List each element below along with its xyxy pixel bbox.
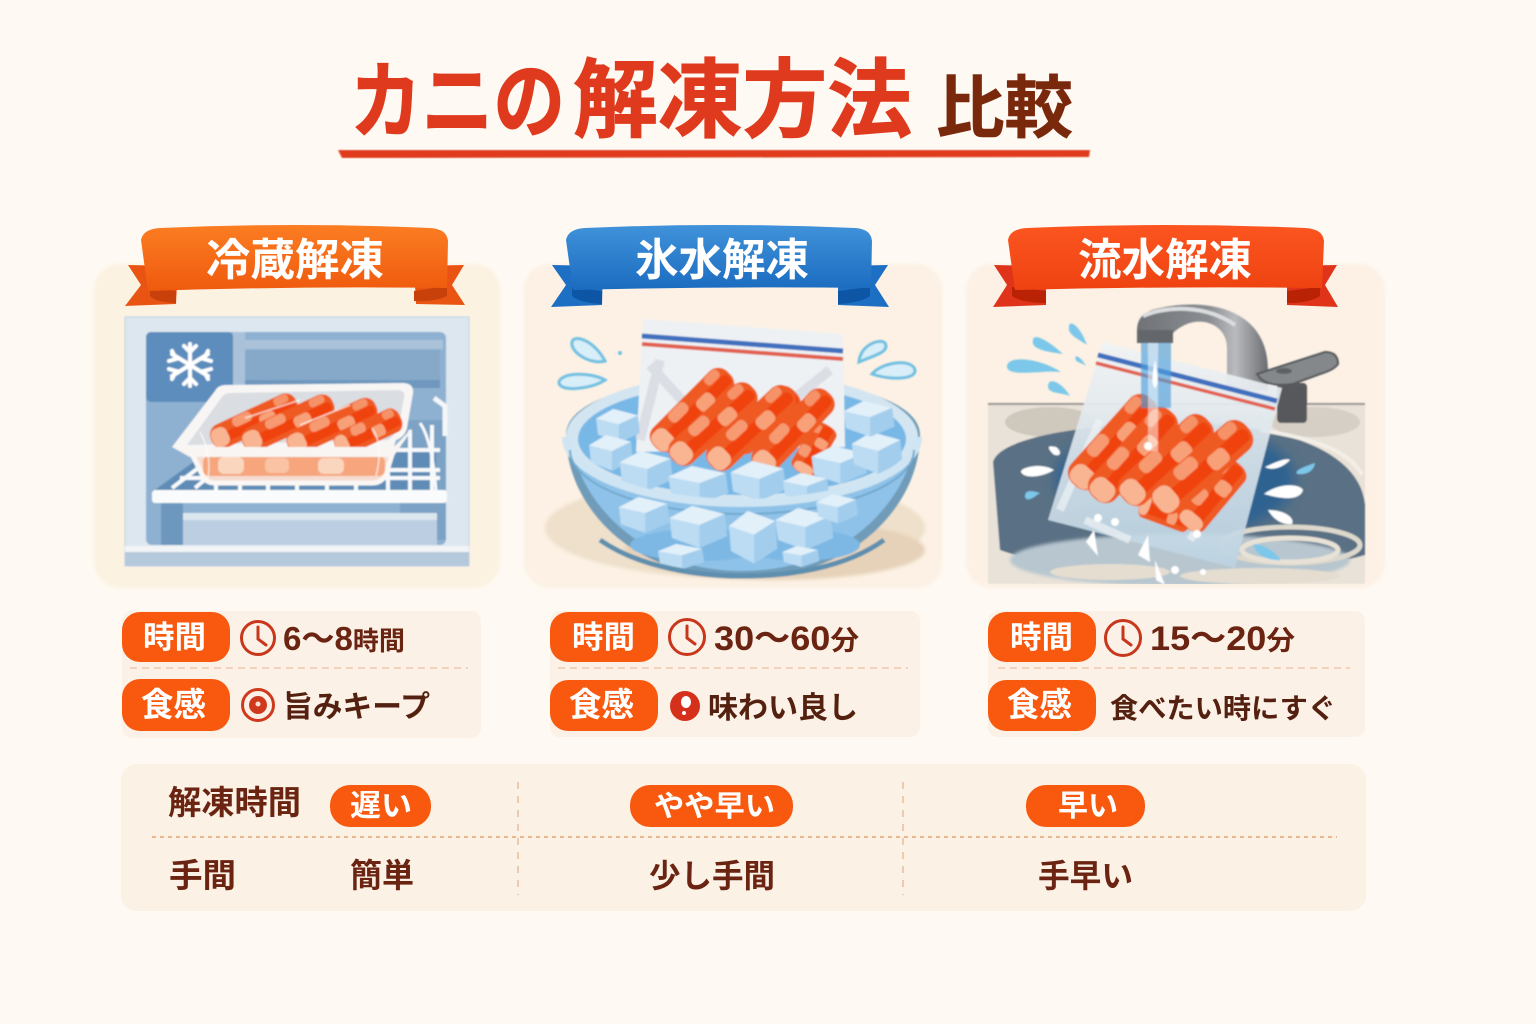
value: 少し手間: 少し手間 xyxy=(649,851,775,897)
running water sink illustration xyxy=(988,304,1365,586)
panel: 氷水解凍 xyxy=(524,224,942,588)
panel: 冷蔵解凍 xyxy=(94,224,500,588)
faucet xyxy=(1137,304,1338,423)
pill: 食感: 食感 xyxy=(141,678,206,726)
info card: 冷蔵解凍 xyxy=(122,611,481,738)
texture value: 食べたい時にすぐ xyxy=(1110,687,1336,727)
pill: 時間: 時間 xyxy=(572,612,635,657)
pill: 時間: 時間 xyxy=(143,612,206,657)
pill: 時間: 時間 xyxy=(1010,612,1073,657)
water drops xyxy=(559,339,915,389)
pill: 食感 xyxy=(550,678,658,731)
pill: 食感 xyxy=(988,678,1096,731)
icon: clock xyxy=(670,620,704,654)
time value: 30～60分 xyxy=(714,619,859,658)
pill: 遅い: 遅い xyxy=(350,781,412,825)
time value: 15～20分 xyxy=(1150,619,1295,658)
panel background xyxy=(524,264,942,588)
ribbon: 流水解凍 xyxy=(993,224,1338,307)
info card: 氷水解凍 xyxy=(550,611,920,737)
ice water bowl illustration xyxy=(545,319,925,580)
pill: 時間 xyxy=(122,612,230,662)
title xyxy=(338,30,1090,158)
splash drops xyxy=(1007,323,1315,561)
panel: 流水解凍 xyxy=(966,224,1385,588)
ribbon: 冷蔵解凍: 冷蔵解凍 xyxy=(206,224,384,288)
icon: clock xyxy=(1106,620,1140,656)
panel background xyxy=(94,264,500,588)
ice cubes top xyxy=(589,401,902,504)
panel background xyxy=(966,264,1385,588)
pill: 食感: 食感 xyxy=(569,678,634,726)
title: hiragana part: カニの xyxy=(350,35,565,156)
icon: taste badge xyxy=(670,691,700,721)
pill: 遅い xyxy=(330,781,431,827)
value: 簡単: 簡単 xyxy=(350,849,414,897)
ribbon: 冷蔵解凍 xyxy=(125,224,465,306)
ice inside bowl xyxy=(619,494,860,569)
zip bag with crab xyxy=(1048,342,1282,568)
icon: target xyxy=(242,690,274,720)
row label: 解凍時間: 解凍時間 xyxy=(168,776,301,824)
ribbon: 氷水解凍: 氷水解凍 xyxy=(635,224,809,288)
texture value: 味わい良し xyxy=(708,683,858,727)
water stream xyxy=(1141,343,1171,451)
title: kanji part: 解凍方法 xyxy=(573,30,912,155)
bowl front rim xyxy=(566,437,918,503)
pill: 食感 xyxy=(122,678,230,731)
freezer badge with snowflake icon xyxy=(146,332,233,402)
pill: 時間 xyxy=(550,612,658,662)
comparison table xyxy=(121,764,1366,911)
tray of crab legs xyxy=(172,383,413,483)
row label: 手間: 手間 xyxy=(169,849,236,897)
fridge illustration xyxy=(125,317,469,566)
wire shelf xyxy=(152,398,447,503)
pill: やや早い xyxy=(630,783,793,827)
ribbon: 氷水解凍 xyxy=(551,224,889,307)
title: comparison word: 比較 xyxy=(936,53,1073,152)
pill: 食感: 食感 xyxy=(1007,678,1072,726)
icon: clock xyxy=(242,622,274,654)
pill: やや早い: やや早い xyxy=(654,783,775,825)
pill: 早い xyxy=(1026,781,1145,827)
time value: 6～8時間 xyxy=(283,620,405,658)
texture value: 旨みキープ xyxy=(283,682,430,726)
title underline xyxy=(338,150,1090,158)
value: 手早い: 手早い xyxy=(1038,851,1133,897)
ribbon: 流水解凍: 流水解凍 xyxy=(1078,224,1252,288)
info card: 流水解凍 xyxy=(988,611,1365,737)
pill: 早い: 早い xyxy=(1058,781,1118,825)
pill: 時間 xyxy=(988,612,1096,662)
zip bag xyxy=(636,319,845,480)
